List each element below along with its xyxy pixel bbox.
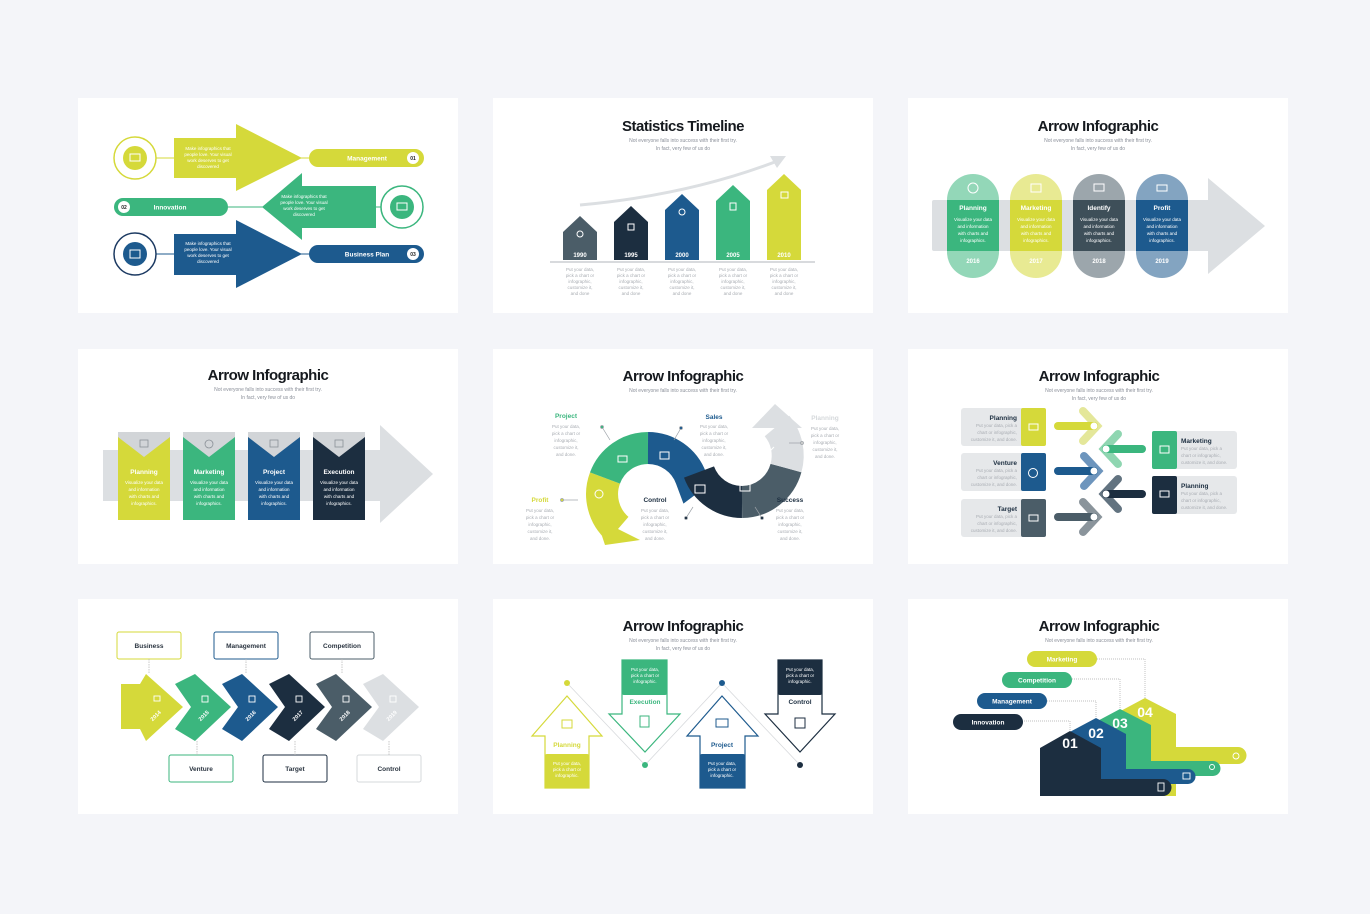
cards: and information xyxy=(258,487,290,492)
house bars: 2005 xyxy=(726,253,740,259)
right cards: customize it, and done. xyxy=(1181,460,1227,465)
pills xyxy=(953,651,1097,730)
capsule overlays: and information xyxy=(1146,224,1178,229)
capsule overlays: with charts and xyxy=(1021,231,1052,236)
bar descriptions: customize it, xyxy=(567,285,593,290)
stepped shapes xyxy=(1040,698,1246,796)
panel: slide 5 S-curve arrow: pick a chart or xyxy=(526,515,555,520)
panel: slide 5 S-curve arrow: infographic, xyxy=(554,438,578,443)
stepped shapes: 01 xyxy=(1062,735,1078,751)
row 2 innovation xyxy=(114,173,423,240)
cards xyxy=(118,432,365,520)
panel: slide 5 S-curve arrow: infographic, xyxy=(643,522,667,527)
title: Arrow Infographic xyxy=(1039,368,1159,385)
cards: Visualize your data xyxy=(125,480,163,485)
capsule overlays: Visualize your data xyxy=(1143,217,1181,222)
title: Statistics Timeline xyxy=(622,118,744,135)
panel: slide 5 S-curve arrow: and done. xyxy=(530,536,550,541)
title: Arrow Infographic xyxy=(623,618,743,635)
pills: Innovation xyxy=(972,720,1004,726)
left cards: Target xyxy=(998,506,1018,513)
house bars: 1995 xyxy=(624,253,638,259)
labels: Control xyxy=(643,497,667,504)
panel: slide 5 S-curve arrow: pick a chart or xyxy=(811,433,840,438)
bar descriptions: customize it, xyxy=(720,285,746,290)
bar descriptions: and done xyxy=(724,291,743,296)
panel: slide 5 S-curve arrow: customize it, xyxy=(701,445,727,450)
capsule overlays: Profit xyxy=(1154,205,1171,212)
right cards: Planning xyxy=(1181,483,1208,490)
bar descriptions: pick a chart or xyxy=(668,273,697,278)
capsule overlays: and information xyxy=(1083,224,1115,229)
baseline xyxy=(550,261,815,263)
panel: slide 6 converging arrows xyxy=(961,368,1237,537)
bar descriptions: and done xyxy=(571,291,590,296)
panel: slide 5 S-curve arrow: Put your data, xyxy=(526,508,554,513)
project arrow xyxy=(687,696,758,788)
panel: slide 5 S-curve arrow: pick a chart or xyxy=(700,431,729,436)
capsule overlays: 2016 xyxy=(966,259,980,265)
panel: slide 2 statistics timeline xyxy=(550,118,815,296)
panel: slide 5 S-curve arrow: pick a chart or xyxy=(776,515,805,520)
row 2 innovation: Make infographics that xyxy=(281,194,327,199)
curved growth arrow xyxy=(580,156,786,205)
panel: slide 5 S-curve arrow: and done. xyxy=(645,536,665,541)
execution arrow: Put your data, xyxy=(631,667,659,672)
row 2 innovation: people love. Your visual xyxy=(280,200,328,205)
subtitle: Not everyone falls into success with their first try. xyxy=(214,387,322,393)
left cards: Venture xyxy=(993,460,1017,467)
dots xyxy=(564,680,803,768)
panel: slide 5 S-curve arrow: infographic, xyxy=(778,522,802,527)
capsule overlays: with charts and xyxy=(958,231,989,236)
cards: Execution xyxy=(323,469,355,476)
panel: slide 5 S-curve arrow: pick a chart or xyxy=(641,515,670,520)
panel: slide 7 chevron timeline: Target xyxy=(285,766,306,773)
labels: Project xyxy=(555,413,578,420)
cards: infographics. xyxy=(196,501,222,506)
subtitle: Not everyone falls into success with their first try. xyxy=(629,388,737,394)
right cards: Put your data, pick a xyxy=(1181,446,1223,451)
bar descriptions: infographic, xyxy=(619,279,643,284)
right cards: Put your data, pick a xyxy=(1181,491,1223,496)
bar descriptions: customize it, xyxy=(618,285,644,290)
bar descriptions: infographic, xyxy=(721,279,745,284)
cards: Visualize your data xyxy=(255,480,293,485)
subtitle: In fact, very few of us do xyxy=(656,646,710,652)
panel: slide 5 S-curve arrow: customize it, xyxy=(527,529,553,534)
labels: Sales xyxy=(706,414,723,421)
execution arrow: Execution xyxy=(629,699,661,706)
row 2 innovation: work deserves to get xyxy=(283,206,326,211)
panel: slide 5 S-curve arrow: customize it, xyxy=(812,447,838,452)
subtitle: Not everyone falls into success with their first try. xyxy=(1045,388,1153,394)
row 1 management: discovered xyxy=(197,164,219,169)
cards: with charts and xyxy=(324,494,355,499)
capsule overlays: Visualize your data xyxy=(1017,217,1055,222)
row 3 business plan: Business Plan xyxy=(345,252,389,258)
cards: infographics. xyxy=(131,501,157,506)
left cards: Put your data, pick a xyxy=(976,423,1017,428)
row 2 innovation: Innovation xyxy=(154,204,186,212)
subtitle: Not everyone falls into success with their first try. xyxy=(629,138,737,144)
right cards xyxy=(1152,431,1237,514)
subtitle: Not everyone falls into success with their first try. xyxy=(1045,638,1153,644)
big gray arrow xyxy=(932,178,1265,274)
panel: slide 7 chevron timeline: Control xyxy=(377,766,401,773)
left cards xyxy=(961,408,1046,537)
panel: slide 5 S-curve arrow: and done. xyxy=(556,452,576,457)
stepped shapes: 03 xyxy=(1112,715,1128,731)
panel: slide 5 S-curve arrow: Put your data, xyxy=(641,508,669,513)
bar descriptions: pick a chart or xyxy=(770,273,799,278)
planning arrow: infographic. xyxy=(555,773,579,778)
bar descriptions xyxy=(566,267,799,296)
panel: slide 5 S-curve arrow: Put your data, xyxy=(776,508,804,513)
bar descriptions: and done xyxy=(775,291,794,296)
panel: slide 5 S-curve arrow: and done. xyxy=(704,452,724,457)
top boxes xyxy=(117,632,421,782)
cards: with charts and xyxy=(259,494,290,499)
project arrow: Project xyxy=(711,742,734,749)
planning arrow: Put your data, xyxy=(553,761,581,766)
title: Arrow Infographic xyxy=(623,368,743,385)
S curve xyxy=(596,404,802,545)
panel: slide 9 stepped houses xyxy=(953,618,1246,796)
left cards: chart or infographic, xyxy=(977,475,1017,480)
control arrow: Control xyxy=(788,699,812,706)
capsule overlays: Planning xyxy=(959,205,987,212)
capsule overlays: 2019 xyxy=(1155,259,1169,265)
row 1 management: work deserves to get xyxy=(187,158,230,163)
labels xyxy=(532,413,839,504)
capsule overlays: Marketing xyxy=(1021,205,1051,212)
capsule overlays: and information xyxy=(957,224,989,229)
panel: slide 5 S-curve arrow: Put your data, xyxy=(700,424,728,429)
bar descriptions: Put your data, xyxy=(668,267,696,272)
bar descriptions: customize it, xyxy=(669,285,695,290)
planning arrow: pick a chart or xyxy=(553,767,582,772)
slide frames xyxy=(78,98,1288,814)
left cards: Put your data, pick a xyxy=(976,468,1017,473)
dotted connectors xyxy=(1022,659,1145,731)
capsule overlays: infographics. xyxy=(1149,238,1175,243)
left cards: Planning xyxy=(990,415,1017,422)
gray arrow xyxy=(103,425,433,523)
cards: and information xyxy=(193,487,225,492)
chevrons: 2017 xyxy=(292,710,305,723)
chevrons: 2018 xyxy=(339,710,352,723)
chevrons: 2014 xyxy=(150,709,163,723)
subtitle: Not everyone falls into success with their first try. xyxy=(1044,138,1152,144)
house bars xyxy=(563,174,801,260)
control arrow: infographic. xyxy=(788,679,812,684)
panel: slide 1 horizontal arrows xyxy=(114,124,424,288)
left cards: customize it, and done. xyxy=(971,528,1017,533)
title: Arrow Infographic xyxy=(1039,618,1159,635)
bar descriptions: infographic, xyxy=(772,279,796,284)
project arrow: Put your data, xyxy=(708,761,736,766)
connecting zigzag xyxy=(567,683,800,765)
labels: Success xyxy=(777,497,804,504)
bar descriptions: infographic, xyxy=(670,279,694,284)
bar descriptions: Put your data, xyxy=(617,267,645,272)
panel: slide 7 chevron timeline: Venture xyxy=(189,766,213,773)
cards: Marketing xyxy=(194,469,224,476)
panel: slide 7 chevron timeline: Management xyxy=(226,643,267,650)
control arrow: pick a chart or xyxy=(786,673,815,678)
execution arrow: pick a chart or xyxy=(631,673,660,678)
row 3 business plan: work deserves to get xyxy=(187,253,230,258)
control arrow xyxy=(765,660,835,752)
left cards: chart or infographic, xyxy=(977,521,1017,526)
converging arrows xyxy=(1058,411,1142,532)
panel: slide 5 S-curve arrow: infographic, xyxy=(528,522,552,527)
house bars: 1990 xyxy=(573,253,587,259)
planning arrow xyxy=(532,696,602,788)
row 3 business plan: 03 xyxy=(410,252,416,258)
execution arrow xyxy=(609,660,680,752)
chevrons xyxy=(121,674,419,741)
row 2 innovation: 02 xyxy=(121,205,127,211)
panel: slide 5 S-curve arrow: infographic, xyxy=(702,438,726,443)
labels: Profit xyxy=(532,497,549,504)
subtitle: In fact, very few of us do xyxy=(1071,146,1125,152)
panel: slide 4 cards on arrow xyxy=(103,367,433,523)
row 1 management: people love. Your visual xyxy=(184,152,232,157)
panel: slide 5 S-curve arrow: customize it, xyxy=(642,529,668,534)
execution arrow: infographic. xyxy=(633,679,657,684)
row 1 management: Make infographics that xyxy=(185,146,231,151)
panel: slide 5 S-curve arrow: customize it, xyxy=(553,445,579,450)
stepped shapes: 04 xyxy=(1137,704,1153,720)
cards: and information xyxy=(323,487,355,492)
capsule overlays: 2017 xyxy=(1029,259,1043,265)
leader dots xyxy=(560,426,804,520)
capsule overlays: Identify xyxy=(1087,205,1111,212)
panel: slide 5 S-curve arrow xyxy=(526,368,840,545)
right cards: customize it, and done. xyxy=(1181,505,1227,510)
chevrons: 2015 xyxy=(198,710,211,723)
segment icons xyxy=(595,447,774,498)
subtitle: In fact, very few of us do xyxy=(1072,396,1126,402)
right cards: Marketing xyxy=(1181,438,1212,445)
cards: Visualize your data xyxy=(320,480,358,485)
title: Arrow Infographic xyxy=(1038,118,1158,135)
project arrow: pick a chart or xyxy=(708,767,737,772)
capsule overlays: infographics. xyxy=(1086,238,1112,243)
subtitle: Not everyone falls into success with their first try. xyxy=(629,638,737,644)
pills: Management xyxy=(992,698,1033,706)
left cards: customize it, and done. xyxy=(971,437,1017,442)
bar descriptions: Put your data, xyxy=(566,267,594,272)
pills: Marketing xyxy=(1047,656,1077,664)
capsule overlays: 2018 xyxy=(1092,259,1106,265)
labels: Planning xyxy=(811,415,839,422)
panel: slide 5 S-curve arrow: and done. xyxy=(815,454,835,459)
right cards: chart or infographic, xyxy=(1181,498,1221,503)
cards: infographics. xyxy=(261,501,287,506)
control arrow: Put your data, xyxy=(786,667,814,672)
row 1 management: Management xyxy=(347,156,388,162)
cards: Planning xyxy=(130,469,158,476)
bar descriptions: and done xyxy=(622,291,641,296)
house bars: 2010 xyxy=(777,253,791,259)
left cards: customize it, and done. xyxy=(971,482,1017,487)
row 2 innovation: discovered xyxy=(293,212,315,217)
panel: slide 5 S-curve arrow: and done. xyxy=(780,536,800,541)
left cards: Put your data, pick a xyxy=(976,514,1017,519)
bar descriptions: Put your data, xyxy=(770,267,798,272)
title: Arrow Infographic xyxy=(208,367,328,384)
pills: Competition xyxy=(1018,678,1056,684)
subtitle: In fact, very few of us do xyxy=(241,395,295,401)
bar descriptions: pick a chart or xyxy=(566,273,595,278)
capsule overlays: Visualize your data xyxy=(1080,217,1118,222)
capsule overlays: infographics. xyxy=(960,238,986,243)
capsules light xyxy=(947,174,1188,278)
panel: slide 5 S-curve arrow: customize it, xyxy=(777,529,803,534)
bar descriptions: infographic, xyxy=(568,279,592,284)
cards: infographics. xyxy=(326,501,352,506)
cards: Visualize your data xyxy=(190,480,228,485)
subtitle: In fact, very few of us do xyxy=(656,146,710,152)
planning arrow: Planning xyxy=(553,742,581,749)
capsule overlays xyxy=(947,183,1188,265)
panel: slide 3 capsule arrow xyxy=(932,118,1265,278)
panel: slide 7 chevron timeline xyxy=(117,632,421,782)
panel: slide 7 chevron timeline: Competition xyxy=(323,643,361,650)
cards: Project xyxy=(263,469,286,476)
house bars: 2000 xyxy=(675,253,689,259)
capsule overlays: and information xyxy=(1020,224,1052,229)
row 1 management: 01 xyxy=(410,156,416,162)
panel: slide 7 chevron timeline: Business xyxy=(135,643,164,650)
cards: and information xyxy=(128,487,160,492)
row 3 business plan: people love. Your visual xyxy=(184,247,232,252)
bar descriptions: customize it, xyxy=(771,285,797,290)
bar descriptions: Put your data, xyxy=(719,267,747,272)
cards: with charts and xyxy=(129,494,160,499)
panel: slide 5 S-curve arrow: infographic, xyxy=(813,440,837,445)
panel: slide 5 S-curve arrow: Put your data, xyxy=(552,424,580,429)
stepped shapes: 02 xyxy=(1088,725,1104,741)
bar descriptions: pick a chart or xyxy=(719,273,748,278)
project arrow: infographic. xyxy=(710,773,734,778)
right cards: chart or infographic, xyxy=(1181,453,1221,458)
left cards: chart or infographic, xyxy=(977,430,1017,435)
capsule overlays: with charts and xyxy=(1084,231,1115,236)
panel: slide 8 up/down arrows xyxy=(532,618,835,788)
chevrons: 2019 xyxy=(386,710,399,723)
row 1 management xyxy=(114,124,424,191)
cards: with charts and xyxy=(194,494,225,499)
row 3 business plan: Make infographics that xyxy=(185,241,231,246)
bar descriptions: pick a chart or xyxy=(617,273,646,278)
bar descriptions: and done xyxy=(673,291,692,296)
row 3 business plan xyxy=(114,220,424,288)
panel: slide 5 S-curve arrow: pick a chart or xyxy=(552,431,581,436)
panel: slide 5 S-curve arrow: Put your data, xyxy=(811,426,839,431)
capsule overlays: with charts and xyxy=(1147,231,1178,236)
capsule overlays: infographics. xyxy=(1023,238,1049,243)
chevrons: 2016 xyxy=(245,710,258,723)
row 3 business plan: discovered xyxy=(197,259,219,264)
capsule overlays: Visualize your data xyxy=(954,217,992,222)
